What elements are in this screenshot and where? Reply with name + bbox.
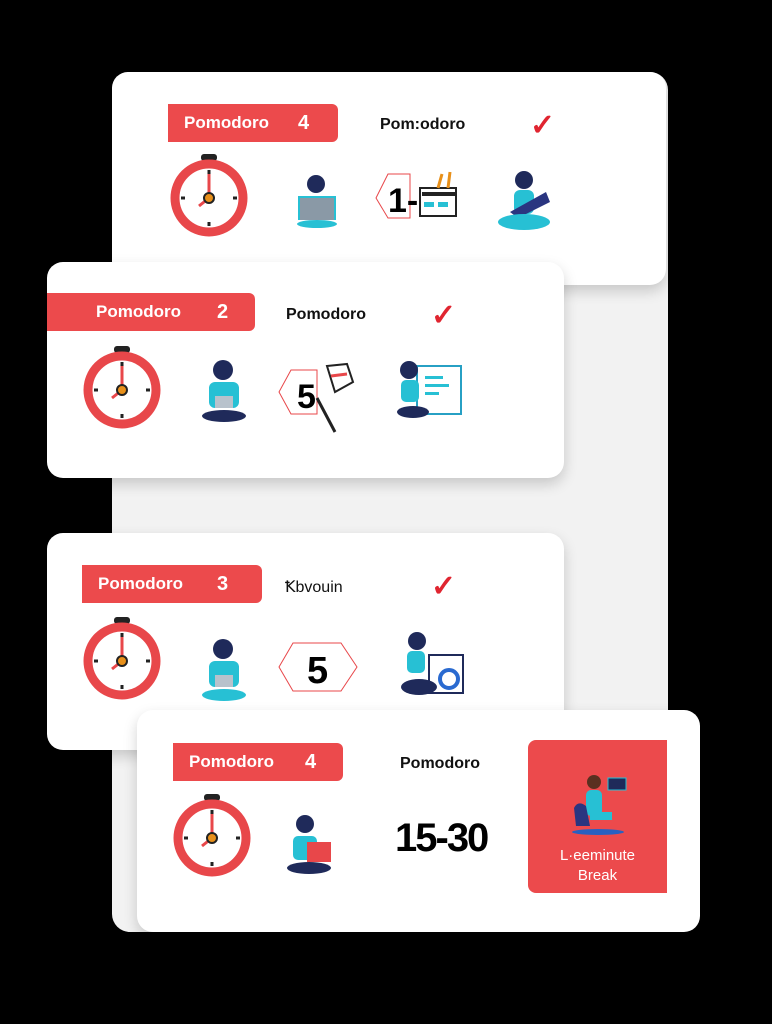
icon: number board bbox=[376, 172, 457, 220]
pill: Pomodoro 4: 4 bbox=[305, 751, 316, 773]
pill: Pomodoro 3: Pomodoro bbox=[98, 574, 183, 593]
card 2 bbox=[47, 262, 564, 478]
check: ✓ bbox=[431, 299, 456, 332]
pill: Pomodoro 2: Pomodoro bbox=[96, 302, 181, 321]
pill: Pomodoro 3 bbox=[82, 565, 262, 603]
pill: Pomodoro 4 bbox=[173, 743, 343, 781]
card 1 bbox=[112, 72, 666, 285]
icon: number 5 board: 5 bbox=[297, 378, 316, 416]
pill: Pomodoro 2: 2 bbox=[217, 301, 228, 323]
icon: person laptop bbox=[297, 175, 337, 228]
pill: Pomodoro 4: Pomodoro bbox=[184, 113, 269, 132]
icon: clock bbox=[174, 794, 250, 876]
icon: kneeling person with gear bbox=[401, 632, 464, 695]
icon: clock bbox=[84, 617, 160, 700]
label: Pom:odoro bbox=[380, 116, 465, 133]
card 3 bbox=[47, 533, 564, 750]
check: ✓ bbox=[431, 570, 456, 603]
icon: number 5 hexagon bbox=[278, 642, 358, 692]
break box bbox=[528, 740, 667, 893]
label: Pomodoro bbox=[400, 755, 480, 772]
break text bbox=[560, 847, 635, 884]
big number: 15-30 bbox=[395, 816, 487, 860]
pill: Pomodoro 4 bbox=[168, 104, 338, 142]
pill: Pomodoro 2 bbox=[47, 293, 255, 331]
label: Ꝁbvouin bbox=[285, 579, 343, 596]
icon: meditating person bbox=[498, 171, 550, 230]
break text: Break bbox=[578, 867, 617, 884]
icon: person laptop bbox=[202, 360, 246, 422]
check: ✓ bbox=[530, 109, 555, 142]
break text: L·eeminute bbox=[560, 847, 635, 864]
label: Pomodoro bbox=[286, 306, 366, 323]
card 4 bbox=[137, 710, 700, 932]
icon: person laptop bbox=[202, 639, 246, 701]
pill: Pomodoro 4: 4 bbox=[298, 112, 309, 134]
icon: clock bbox=[84, 346, 160, 428]
back panel bbox=[112, 72, 668, 932]
icon: number 5 hexagon: 5 bbox=[307, 650, 328, 692]
pill: Pomodoro 3: 3 bbox=[217, 573, 228, 595]
pill: Pomodoro 4: Pomodoro bbox=[189, 752, 274, 771]
icon: clock bbox=[170, 154, 248, 236]
icon: person with screen bbox=[397, 361, 462, 418]
icon: number 5 board bbox=[278, 362, 354, 433]
icon: seated person bbox=[572, 775, 626, 835]
icon: person red laptop bbox=[287, 815, 331, 874]
icon: number board: 1- bbox=[388, 182, 418, 220]
